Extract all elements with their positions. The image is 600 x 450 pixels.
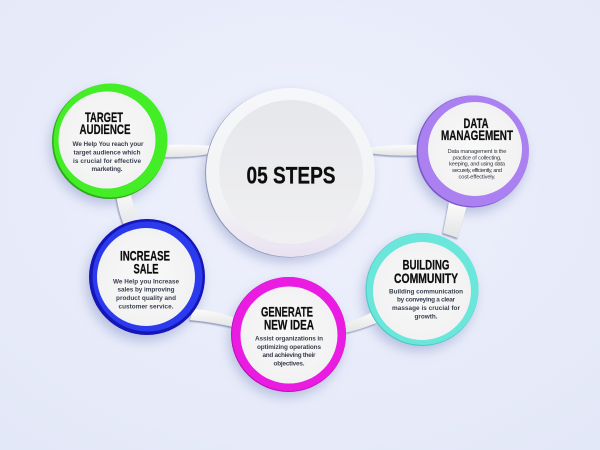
step: generate new idea: and achieving their — [262, 352, 316, 359]
step: increase sale: sales by improving — [118, 287, 175, 294]
step: target audience: marketing. — [92, 166, 123, 173]
step: generate new idea: Assist organizations in — [255, 336, 323, 343]
step: building community: by conveying a clear — [397, 297, 456, 304]
step: increase sale: SALE — [134, 260, 158, 276]
step: increase sale — [89, 219, 205, 335]
step: data management: keeping, and using data — [449, 162, 506, 168]
step: building community — [366, 233, 478, 346]
step: data management — [416, 96, 529, 208]
step: increase sale: customer service. — [118, 303, 174, 310]
step: target audience: We Help You reach your — [72, 141, 144, 148]
step: data management: practice of collecting, — [452, 155, 502, 161]
step: target audience: AUDIENCE — [80, 121, 130, 137]
step: building community: massage is crucial for — [392, 305, 460, 312]
step: target audience: TARGET — [85, 109, 123, 125]
step: data management: MANAGEMENT — [441, 127, 513, 143]
step: target audience: target audience which — [74, 150, 141, 157]
central circle: 05 steps — [205, 88, 375, 258]
step: increase sale: We Help you Increase — [113, 278, 179, 285]
step: increase sale: INCREASE — [120, 248, 170, 264]
step: target audience — [52, 84, 168, 199]
step: building community: COMMUNITY — [394, 270, 458, 286]
step: target audience: is crucial for effective — [73, 158, 141, 165]
step: generate new idea: GENERATE — [261, 304, 313, 320]
central circle: 05 steps: 05 STEPS — [246, 162, 336, 190]
step: data management: Data management is the — [448, 149, 506, 155]
step: building community: BUILDING — [402, 256, 450, 272]
step: generate new idea: NEW IDEA — [264, 316, 314, 332]
step: data management: cost-effectively. — [458, 174, 496, 180]
step: data management: securely, efficiently, and — [452, 168, 502, 174]
step: generate new idea: objectives. — [274, 360, 305, 368]
step: increase sale: product quality and — [116, 295, 176, 302]
soft shadows under circles — [50, 90, 526, 397]
step: building community: growth. — [414, 313, 438, 320]
step: data management: DATA — [464, 115, 488, 131]
step: generate new idea — [231, 277, 346, 392]
connectors between circles — [116, 145, 467, 333]
step: generate new idea: optimizing operations — [257, 344, 321, 351]
step: building community: Building communication — [389, 288, 463, 295]
